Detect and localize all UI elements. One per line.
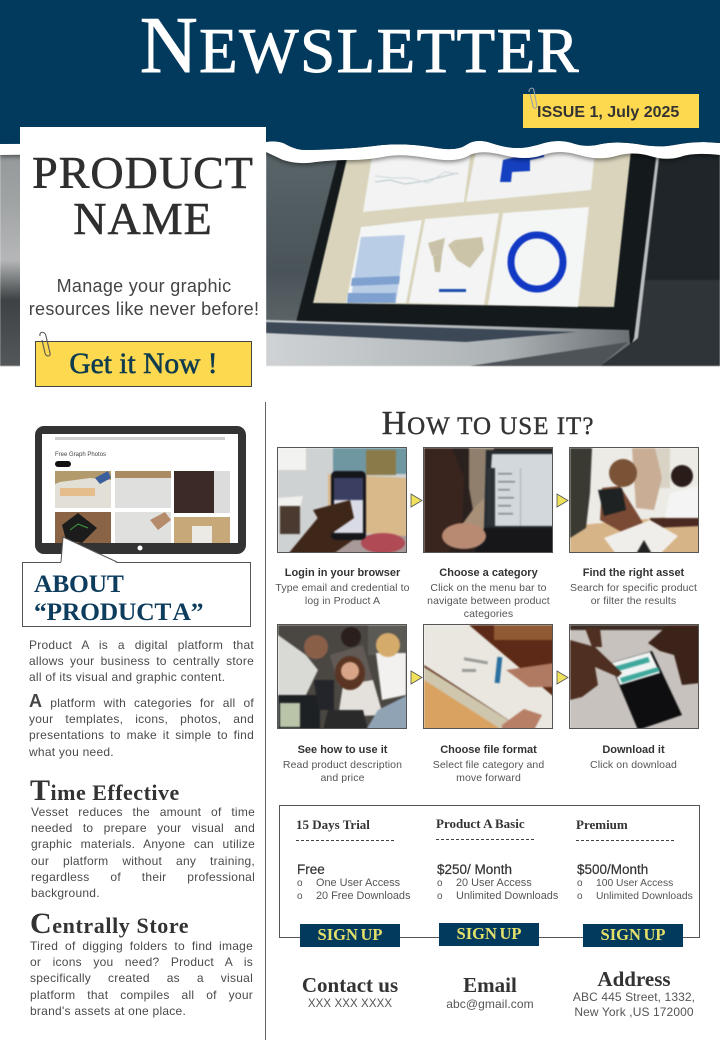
text block: about description: Product A is a digital platform that <box>29 638 254 652</box>
plan title: Premium <box>576 817 628 832</box>
callout pointer <box>60 536 118 563</box>
plan features <box>437 877 558 902</box>
step description: log in Product A <box>305 595 380 607</box>
text block: platform description: what you need. <box>29 745 114 759</box>
step description: Search for specific product <box>570 582 697 594</box>
title: NEWSLETTER <box>140 2 580 90</box>
plan features: Unlimited Downloads <box>596 891 693 902</box>
button: sign up: SIGN UP <box>457 924 521 943</box>
contact: email <box>446 973 534 1011</box>
text block: centrally store: specifically created as a visual <box>30 971 253 985</box>
step title: Choose file format <box>440 744 537 756</box>
step description <box>433 759 544 784</box>
arrow <box>556 493 569 508</box>
text block: platform description <box>29 691 254 759</box>
call to action: get it now: Get it Now ! <box>69 348 218 380</box>
text block: platform description: your templates, icons, photos, and <box>29 712 254 726</box>
arrow <box>556 670 569 685</box>
text block: time effective: graphic materials. Anyone can utilize <box>31 837 255 851</box>
button: sign up: SIGN UP <box>318 925 382 944</box>
callout: about product a <box>22 562 251 627</box>
step title: See how to use it <box>298 744 387 756</box>
icon: paperclip on button <box>39 332 51 356</box>
step: choose category <box>427 567 550 620</box>
step description <box>570 582 697 607</box>
plan: 15 days trial <box>296 817 410 947</box>
plan title: Product A Basic <box>436 816 525 831</box>
contact heading: Contact us <box>302 973 398 997</box>
text block: about description: allows your business to centrally store <box>29 654 254 668</box>
plan features: 20 User Access <box>456 877 532 889</box>
contact: address <box>564 967 704 1021</box>
address value: ABC 445 Street, 1332, <box>573 990 695 1004</box>
hero photo: laptop with dashboard <box>0 140 720 367</box>
heading: time effective: Time Effective <box>30 774 180 807</box>
contact: phone <box>302 973 398 1010</box>
text block: platform description: presentations to make it simple to find <box>29 728 254 742</box>
button: sign up <box>583 924 683 947</box>
text block: time effective <box>31 805 255 900</box>
plan features: One User Access <box>316 877 400 889</box>
heading: centrally store: Centrally Store <box>30 907 189 940</box>
plan features: Unlimited Downloads <box>456 890 558 902</box>
step: see how <box>283 744 402 784</box>
issue tag: ISSUE 1, July 2025 <box>537 104 679 121</box>
photo: document held in hands <box>423 624 553 729</box>
icon: tablet showing photo gallery: Free Graph Photos <box>55 452 106 458</box>
photo: team at a computer <box>277 624 407 729</box>
plan features: o <box>437 891 443 902</box>
step description: and price <box>320 772 365 784</box>
plan features: 20 Free Downloads <box>316 890 410 902</box>
arrow <box>410 670 423 685</box>
address heading: Address <box>597 967 671 991</box>
step description: Select file category and <box>433 759 544 771</box>
about heading: “PRODUCT A” <box>34 596 203 626</box>
text block: centrally store <box>30 939 253 1018</box>
about heading <box>34 569 203 626</box>
step: download <box>590 744 677 771</box>
heading: how to use it: HOW TO USE IT? <box>382 405 594 442</box>
plan price: $500/Month <box>577 862 648 877</box>
text block: centrally store: brand's assets at one place. <box>30 1004 186 1018</box>
step: right asset <box>570 567 697 607</box>
arrow <box>410 493 423 508</box>
plan title: 15 Days Trial <box>296 817 370 832</box>
icon: tablet showing photo gallery <box>35 426 246 554</box>
step description: or filter the results <box>591 595 676 607</box>
photo: phone in kitchen <box>277 447 407 553</box>
email heading: Email <box>463 973 517 997</box>
product name heading: PRODUCT <box>32 147 254 198</box>
plan: premium <box>576 817 693 947</box>
plan features: o <box>297 878 303 889</box>
photo: laptop with menu <box>423 447 553 553</box>
step description: categories <box>464 608 513 620</box>
step title: Choose a category <box>439 567 538 579</box>
issue tag <box>523 94 699 128</box>
text block: centrally store: or icons you need? Product A is <box>30 955 253 969</box>
button: sign up <box>439 923 539 946</box>
plan features: o <box>577 891 583 902</box>
photo: hands on smartphone <box>569 624 699 729</box>
photo: people around a table <box>569 447 699 553</box>
text block: time effective: Vesset reduces the amount of time <box>31 805 255 819</box>
contact value: XXX XXX XXXX <box>308 998 392 1010</box>
panel: pricing <box>279 805 700 938</box>
text block: time effective: background. <box>31 886 100 900</box>
icon: paperclip on issue tag <box>528 88 538 109</box>
plan features: o <box>577 878 583 889</box>
plan features <box>577 878 693 902</box>
product name heading: NAME <box>73 193 213 244</box>
text block: centrally store: Tired of digging folders to find image <box>30 939 253 953</box>
plan features <box>297 877 410 902</box>
header band <box>0 0 720 167</box>
about heading: ABOUT <box>34 569 124 598</box>
tagline <box>29 276 259 318</box>
step description: move forward <box>456 772 521 784</box>
tagline: Manage your graphic <box>57 276 231 296</box>
step description: Read product description <box>283 759 402 771</box>
text block: about description <box>29 638 254 684</box>
step description: Click on the menu bar to <box>430 582 547 594</box>
plan features: o <box>297 891 303 902</box>
step title: Login in your browser <box>285 567 400 579</box>
step description: Type email and credential to <box>275 582 410 594</box>
step description <box>275 582 410 607</box>
text block: time effective: needed to prepare your visual and <box>31 821 255 835</box>
button: sign up <box>300 924 400 947</box>
step description <box>427 582 550 620</box>
text block: time effective: our platform without any training, <box>31 854 255 868</box>
call to action: get it now <box>35 341 252 387</box>
text block: platform description: A platform with categories for all of <box>29 691 254 711</box>
step title: Find the right asset <box>583 567 684 579</box>
button: sign up: SIGN UP <box>601 925 665 944</box>
step title: Download it <box>602 744 665 756</box>
step: login <box>275 567 410 607</box>
address value <box>564 990 704 1020</box>
address value: New York ,US 172000 <box>574 1004 694 1018</box>
tagline: resources like never before! <box>29 298 259 318</box>
step description: Click on download <box>590 759 677 771</box>
step: file format <box>433 744 544 784</box>
plan: product a basic <box>436 816 558 946</box>
text block: about description: all of its visual and graphic content. <box>29 670 225 684</box>
product name heading <box>32 147 254 244</box>
text block: time effective: regardless of their professional <box>31 870 255 884</box>
email value: abc@gmail.com <box>446 997 534 1011</box>
step description: navigate between product <box>427 595 550 607</box>
plan price: $250/ Month <box>437 862 512 877</box>
plan features: 100 User Access <box>596 878 673 889</box>
divider <box>265 402 266 1040</box>
plan price: Free <box>297 862 325 877</box>
plan features: o <box>437 878 443 889</box>
text block: centrally store: platform that compiles all of your <box>30 988 253 1002</box>
panel: product name <box>20 127 266 389</box>
step description <box>283 759 402 784</box>
